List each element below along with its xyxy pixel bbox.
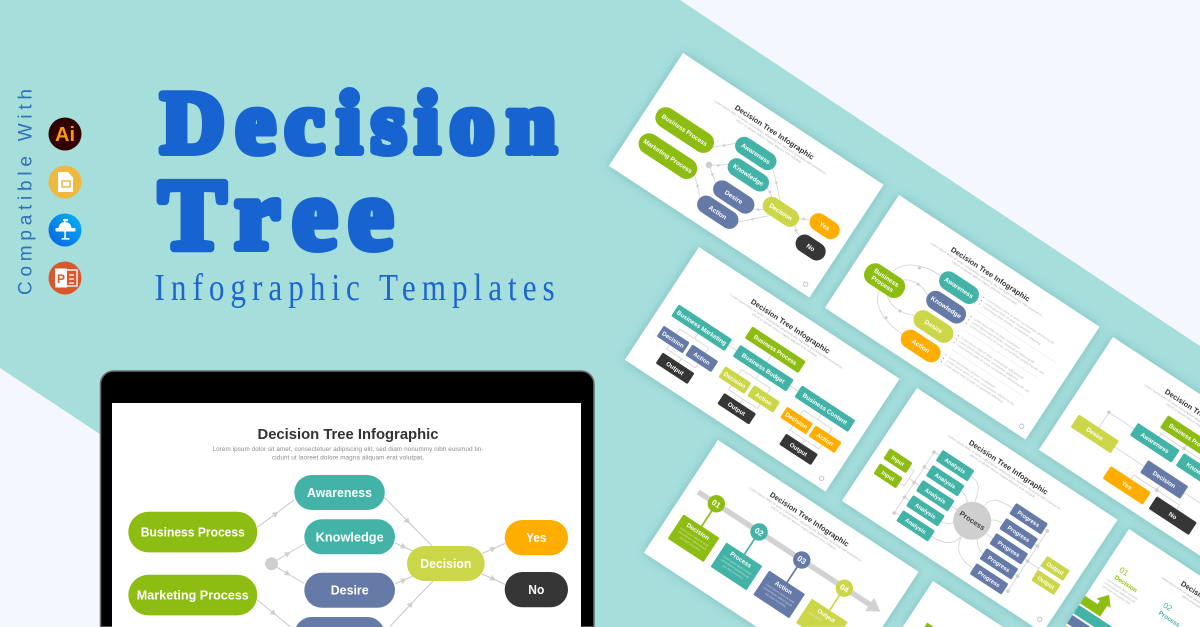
node: action bbox=[897, 326, 944, 366]
row: knowledge bbox=[962, 315, 1049, 380]
box: output bbox=[1031, 570, 1061, 595]
connectors bbox=[664, 305, 848, 453]
row: action: Lorem ipsum dolor sit amet, consectetuer bbox=[948, 356, 996, 389]
step 01 text: sed diam nonummy nibh bbox=[1101, 584, 1131, 606]
lime step bbox=[1065, 625, 1069, 627]
green arrow step bbox=[1080, 584, 1116, 619]
box: output: Output bbox=[665, 361, 684, 377]
node: knowledge: Knowledge bbox=[316, 530, 384, 544]
slide 7: growth steps bbox=[1065, 529, 1200, 627]
node: yes bbox=[806, 210, 843, 243]
box: input bbox=[883, 448, 913, 473]
box: business content bbox=[794, 385, 856, 432]
slide 8: partial slide bbox=[903, 581, 1003, 627]
node: no: No bbox=[805, 243, 816, 253]
footer mark bbox=[1019, 423, 1025, 429]
node: yes bbox=[505, 520, 568, 555]
laptop bezel bbox=[100, 371, 594, 627]
footer mark bbox=[1037, 616, 1043, 622]
box: analysis: Analysis bbox=[943, 458, 966, 476]
node: business process: Business Process bbox=[660, 113, 709, 148]
node: marketing process: Marketing Process bbox=[642, 138, 694, 176]
connectors bbox=[257, 497, 505, 626]
row: desire: Lorem ipsum dolor sit amet, consectetuer adipiscing bbox=[959, 340, 1019, 381]
box: output: Output bbox=[1036, 576, 1055, 591]
box: no bbox=[1149, 496, 1197, 535]
box: business marketing: Business Marketing bbox=[675, 309, 728, 347]
node: awareness: Awareness bbox=[740, 142, 771, 166]
slide 5: process hub bbox=[842, 388, 1118, 627]
box: progress: Progress bbox=[986, 555, 1010, 574]
box: input: Input bbox=[890, 455, 905, 468]
box: action bbox=[747, 385, 780, 413]
box: decision: Decision bbox=[1151, 470, 1177, 490]
box: progress: Progress bbox=[976, 570, 1001, 589]
slide heading: Decision Tree Infographic bbox=[949, 245, 1032, 304]
node: no bbox=[505, 572, 568, 607]
row: knowledge: Lorem ipsum dolor sit amet, consectetuer adipiscing elit bbox=[971, 320, 1035, 364]
green chart element bbox=[924, 623, 934, 627]
teal step bbox=[1074, 605, 1112, 627]
box: progress: Progress bbox=[1006, 525, 1030, 544]
node: no bbox=[792, 231, 829, 264]
box: awareness: Awareness bbox=[1139, 431, 1170, 455]
box: no: No bbox=[1167, 511, 1178, 521]
slide heading: Lorem ipsum dolor sit amet, consectetuer adipiscing elit, sed diam nonummy nibh euismod tin- bbox=[930, 241, 1044, 318]
box: analysis: Analysis bbox=[933, 473, 956, 491]
slide heading: Lorem ipsum dolor sit amet, consectetuer adipiscing elit, sed diam nonummy nibh euismod tin- bbox=[714, 99, 828, 176]
node: awareness bbox=[732, 133, 780, 174]
box: business content: Business Content bbox=[801, 392, 848, 426]
node: desire: Desire bbox=[923, 319, 944, 336]
node: knowledge bbox=[724, 155, 772, 195]
footer mark bbox=[803, 281, 809, 287]
box: action: Action bbox=[753, 392, 773, 408]
box: progress: Progress bbox=[996, 540, 1020, 559]
slide heading: Lorem ipsum dolor sit amet, consectetuer adipiscing elit, sed diam nonummy nibh euismod tin- bbox=[730, 293, 844, 370]
box: decision bbox=[780, 407, 813, 434]
connectors bbox=[1085, 399, 1200, 524]
box: action bbox=[685, 344, 718, 372]
icon: illustrator bbox=[48, 118, 82, 150]
node: decision: Decision bbox=[768, 202, 793, 223]
box: yes: Yes bbox=[1120, 480, 1133, 492]
step 02 bbox=[711, 513, 782, 590]
step 01: consectetuer adipiscing elit bbox=[677, 529, 708, 551]
node: yes: Yes bbox=[526, 531, 546, 545]
icon: illustrator: Ai bbox=[55, 124, 75, 146]
node: no: No bbox=[528, 583, 545, 597]
node: business process bbox=[651, 103, 718, 157]
box: business process bbox=[1160, 415, 1200, 462]
title bbox=[159, 75, 556, 270]
step 01 text: Decision bbox=[1113, 574, 1139, 594]
box: action: Action bbox=[815, 433, 834, 448]
box: yes bbox=[1103, 466, 1151, 505]
box: analysis: Analysis bbox=[903, 518, 927, 536]
node: marketing process bbox=[635, 129, 701, 183]
slide 6: org tree bbox=[1039, 337, 1200, 582]
box: decision: Decision bbox=[722, 372, 747, 391]
box: output: Output bbox=[726, 402, 746, 418]
node: awareness: Awareness bbox=[943, 276, 975, 301]
step 03: consectetuer adipiscing elit bbox=[763, 586, 793, 608]
analysis boxes bbox=[896, 450, 975, 542]
row: action: Lorem ipsum dolor sit amet, consectetuer adipiscing elit bbox=[946, 359, 1015, 406]
node: decision: Decision bbox=[420, 557, 471, 571]
slate step bbox=[1067, 615, 1091, 627]
step 04: Output bbox=[816, 608, 836, 625]
step 01: Lorem ipsum dolor sit amet bbox=[679, 526, 710, 548]
node: knowledge bbox=[923, 287, 970, 327]
step 01: 01 bbox=[710, 498, 723, 511]
node: business process: Business bbox=[872, 268, 900, 289]
box: output bbox=[779, 434, 818, 465]
step 01: Decision bbox=[685, 522, 711, 542]
start dot bbox=[704, 160, 714, 170]
box: progress: Progress bbox=[1016, 510, 1040, 529]
node: desire: Desire bbox=[723, 189, 744, 206]
icon: powerpoint bbox=[48, 262, 82, 294]
node: knowledge: Knowledge bbox=[731, 163, 765, 188]
box: output: Output bbox=[788, 442, 808, 458]
box: awareness bbox=[1130, 423, 1180, 463]
slide heading: Lorem ipsum dolor sit amet, consectetuer adipiscing elit, sed diam nonummy nibh euismod tin- bbox=[948, 434, 1062, 511]
node: knowledge: Knowledge bbox=[929, 295, 963, 321]
compatible with label: Compatible With bbox=[16, 89, 36, 295]
laptop screen bbox=[112, 403, 581, 627]
process hub circle bbox=[946, 494, 998, 547]
box: output bbox=[717, 393, 756, 425]
step 04: Lorem ipsum bbox=[807, 610, 824, 623]
slide 4: timeline bbox=[644, 440, 919, 627]
connector dots bbox=[884, 265, 928, 325]
step 01 text bbox=[1101, 562, 1149, 608]
connectors bbox=[882, 445, 1061, 599]
box: analysis: Analysis bbox=[923, 488, 946, 506]
screen heading: Decision Tree Infographic bbox=[258, 426, 438, 443]
row: action: Lorem ipsum dolor sit amet, consectetuer adipiscing bbox=[944, 362, 1004, 404]
box: input bbox=[873, 463, 903, 488]
slide heading: cidunt ut laoreet dolore magna aliquam erat volutpat, bbox=[751, 312, 819, 358]
node: action: Action bbox=[910, 338, 931, 355]
slide heading: cidunt ut laoreet dolore magna aliquam erat volutpat, bbox=[969, 453, 1037, 499]
row: knowledge: Lorem ipsum dolor sit amet, consectetuer adipiscing elit, sed bbox=[969, 324, 1045, 376]
node: marketing process: Marketing Process bbox=[137, 589, 249, 603]
box: decision: Decision bbox=[660, 331, 685, 350]
row: desire bbox=[950, 334, 1035, 398]
box: business process: Business Process bbox=[752, 334, 798, 367]
step 02: sed diam nonummy bbox=[722, 563, 745, 581]
node: knowledge bbox=[304, 519, 395, 554]
box: action: Action bbox=[692, 352, 711, 367]
connector dots bbox=[1085, 401, 1187, 493]
timeline arrow bbox=[694, 485, 885, 618]
row: awareness bbox=[975, 295, 1067, 364]
node: awareness: Awareness bbox=[307, 486, 372, 500]
screen heading: Lorem ipsum dolor sit amet, consectetuer adipiscing elit, sed diam nonummy nibh euismod tin- bbox=[212, 446, 484, 453]
box: action bbox=[809, 425, 842, 453]
node: desire bbox=[304, 573, 395, 608]
step 01 bbox=[668, 485, 739, 562]
slide heading: Decision Tree Infographic bbox=[749, 297, 832, 356]
node: yes: Yes bbox=[818, 221, 831, 233]
icon: keynote bbox=[48, 214, 82, 246]
slide heading: Decision Tree Infographic bbox=[733, 103, 816, 162]
connectors bbox=[685, 133, 822, 255]
curved connectors bbox=[866, 252, 941, 334]
box: business budget bbox=[733, 345, 794, 392]
box: output: Output bbox=[1045, 562, 1064, 577]
slide 1: decision tree bbox=[609, 53, 884, 298]
screen heading: cidunt ut laoreet dolore magna aliquam erat volutpat, bbox=[272, 454, 424, 462]
step 01 text: 01 bbox=[1118, 565, 1130, 578]
box: decision bbox=[1140, 460, 1188, 499]
row: awareness: Lorem ipsum dolor sit amet, consectetuer adipiscing bbox=[982, 305, 1042, 346]
box: desire bbox=[1071, 414, 1119, 453]
slide heading: cidunt ut laoreet dolore magna aliquam erat volutpat, bbox=[735, 118, 803, 164]
box: input: Input bbox=[880, 470, 895, 483]
node: business process bbox=[860, 259, 909, 302]
step 03: sed diam nonummy bbox=[764, 591, 787, 609]
screen heading bbox=[212, 426, 484, 462]
step 04: 04 bbox=[838, 582, 851, 595]
text rows bbox=[940, 295, 1067, 417]
slide heading bbox=[1142, 376, 1200, 463]
box: output bbox=[656, 352, 695, 384]
title line: decision: Decision bbox=[161, 75, 556, 172]
box: business process bbox=[745, 326, 806, 373]
node: decision bbox=[759, 193, 803, 230]
icon: powerpoint: P bbox=[57, 272, 65, 286]
node: business process: Process bbox=[870, 275, 895, 294]
light corner bottom left bbox=[0, 368, 392, 627]
box: decision: Decision bbox=[784, 412, 808, 431]
node: decision bbox=[407, 546, 485, 581]
start dot bbox=[265, 557, 278, 570]
title line: tree: Tree bbox=[159, 159, 393, 270]
box: decision bbox=[657, 326, 690, 353]
box: analysis: Analysis bbox=[913, 503, 936, 521]
box: desire: Desire bbox=[1085, 426, 1105, 443]
step 02: consectetuer adipiscing elit bbox=[720, 558, 750, 579]
process hub circle: Process bbox=[958, 509, 987, 532]
node: desire bbox=[910, 306, 957, 347]
node: awareness bbox=[294, 475, 385, 510]
node: desire: Desire bbox=[331, 584, 369, 598]
step 02 text bbox=[1157, 601, 1187, 627]
row: awareness: Lorem ipsum dolor sit amet, consectetuer bbox=[984, 301, 1032, 335]
row: desire: Lorem ipsum dolor sit amet, consectetuer adipiscing elit, sed bbox=[956, 343, 1031, 394]
row: knowledge: Lorem ipsum dolor sit amet, consectetuer bbox=[973, 317, 1022, 351]
node: action (cropped) bbox=[296, 617, 383, 627]
light corner top right bbox=[680, 0, 1200, 346]
footer mark bbox=[819, 475, 825, 481]
step 03: 03 bbox=[795, 554, 808, 567]
node: desire bbox=[710, 177, 758, 217]
node: action bbox=[694, 192, 742, 232]
slide heading: cidunt ut laoreet dolore magna aliquam erat volutpat, bbox=[770, 505, 838, 551]
progress boxes bbox=[970, 503, 1048, 595]
step 02: Lorem ipsum dolor sit amet bbox=[722, 554, 753, 576]
icon: google slides bbox=[48, 166, 82, 198]
connector dots bbox=[890, 450, 1052, 594]
row: desire: Lorem ipsum dolor sit amet, consectetuer adipiscing elit bbox=[961, 336, 1025, 380]
laptop mockup bbox=[100, 371, 594, 627]
box: knowledge bbox=[1176, 453, 1200, 493]
step 03 bbox=[753, 541, 825, 618]
slide heading: Decision Tree Infographic bbox=[768, 490, 851, 549]
step 01 text: consectetuer adipiscing elit, bbox=[1104, 581, 1137, 604]
slide 3: business brackets bbox=[625, 247, 900, 492]
box: business budget: Business Budget bbox=[740, 352, 786, 385]
node: business process: Business Process bbox=[141, 526, 245, 540]
step 04 bbox=[796, 569, 867, 627]
step 03: Action bbox=[773, 580, 793, 596]
box: business marketing bbox=[671, 304, 732, 351]
node: marketing process bbox=[128, 575, 257, 615]
step 01 text: Lorem ipsum dolor sit amet, bbox=[1106, 577, 1139, 601]
software icons bbox=[48, 118, 82, 294]
subtitle: Infographic Templates bbox=[154, 266, 555, 309]
step 01: sed diam nonummy bbox=[679, 535, 702, 552]
step 03: Lorem ipsum dolor sit amet bbox=[765, 582, 795, 604]
node: awareness bbox=[935, 268, 983, 308]
node: action: Action bbox=[707, 204, 728, 221]
slide 2: process list bbox=[825, 195, 1100, 440]
node: business process bbox=[128, 512, 257, 552]
slide heading: Lorem ipsum dolor sit amet, consectetuer adipiscing elit, sed diam nonummy nibh euismod tin- bbox=[749, 486, 863, 563]
step 02: Process bbox=[729, 551, 753, 570]
box: output bbox=[1040, 556, 1070, 581]
row: awareness: Lorem ipsum dolor sit amet, consectetuer adipiscing elit bbox=[986, 298, 1055, 345]
box: decision bbox=[718, 366, 751, 394]
step 02: 02 bbox=[753, 526, 766, 539]
slide heading: cidunt ut laoreet dolore magna aliquam erat volutpat, bbox=[951, 260, 1019, 306]
step 02 text: 02 bbox=[1161, 601, 1174, 613]
slide heading: Decision Tree Infographic bbox=[967, 438, 1050, 497]
